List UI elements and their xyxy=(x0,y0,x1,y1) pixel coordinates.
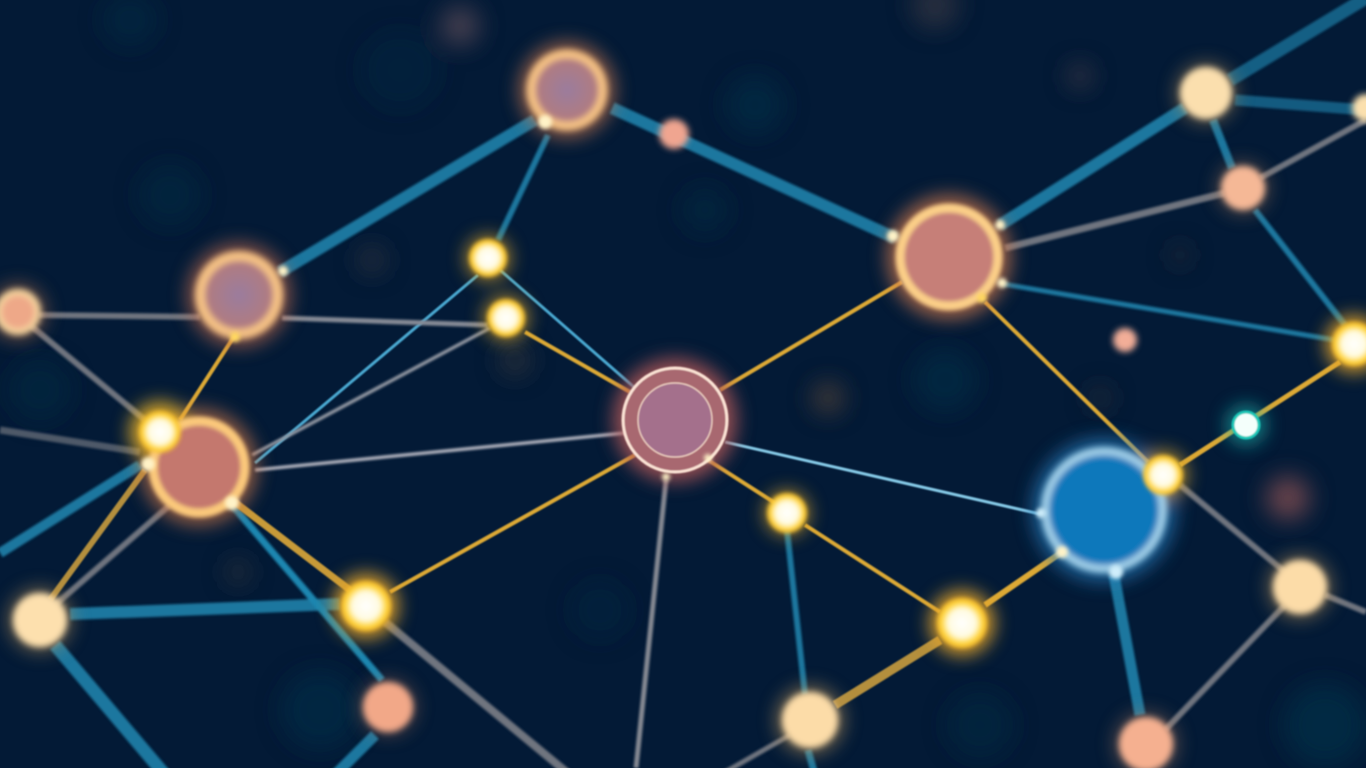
large node: top right xyxy=(900,208,998,306)
line junction sparks xyxy=(141,115,1123,579)
connecting lines: gold xyxy=(50,282,1340,705)
teal node xyxy=(1233,412,1259,438)
large node: lower left xyxy=(153,421,245,513)
connecting lines: light blue xyxy=(255,270,1040,514)
large node: left xyxy=(200,256,278,334)
yellow nodes xyxy=(139,239,1366,648)
central node xyxy=(623,368,727,472)
large node: top centre xyxy=(531,54,603,126)
blue node xyxy=(1045,451,1163,569)
